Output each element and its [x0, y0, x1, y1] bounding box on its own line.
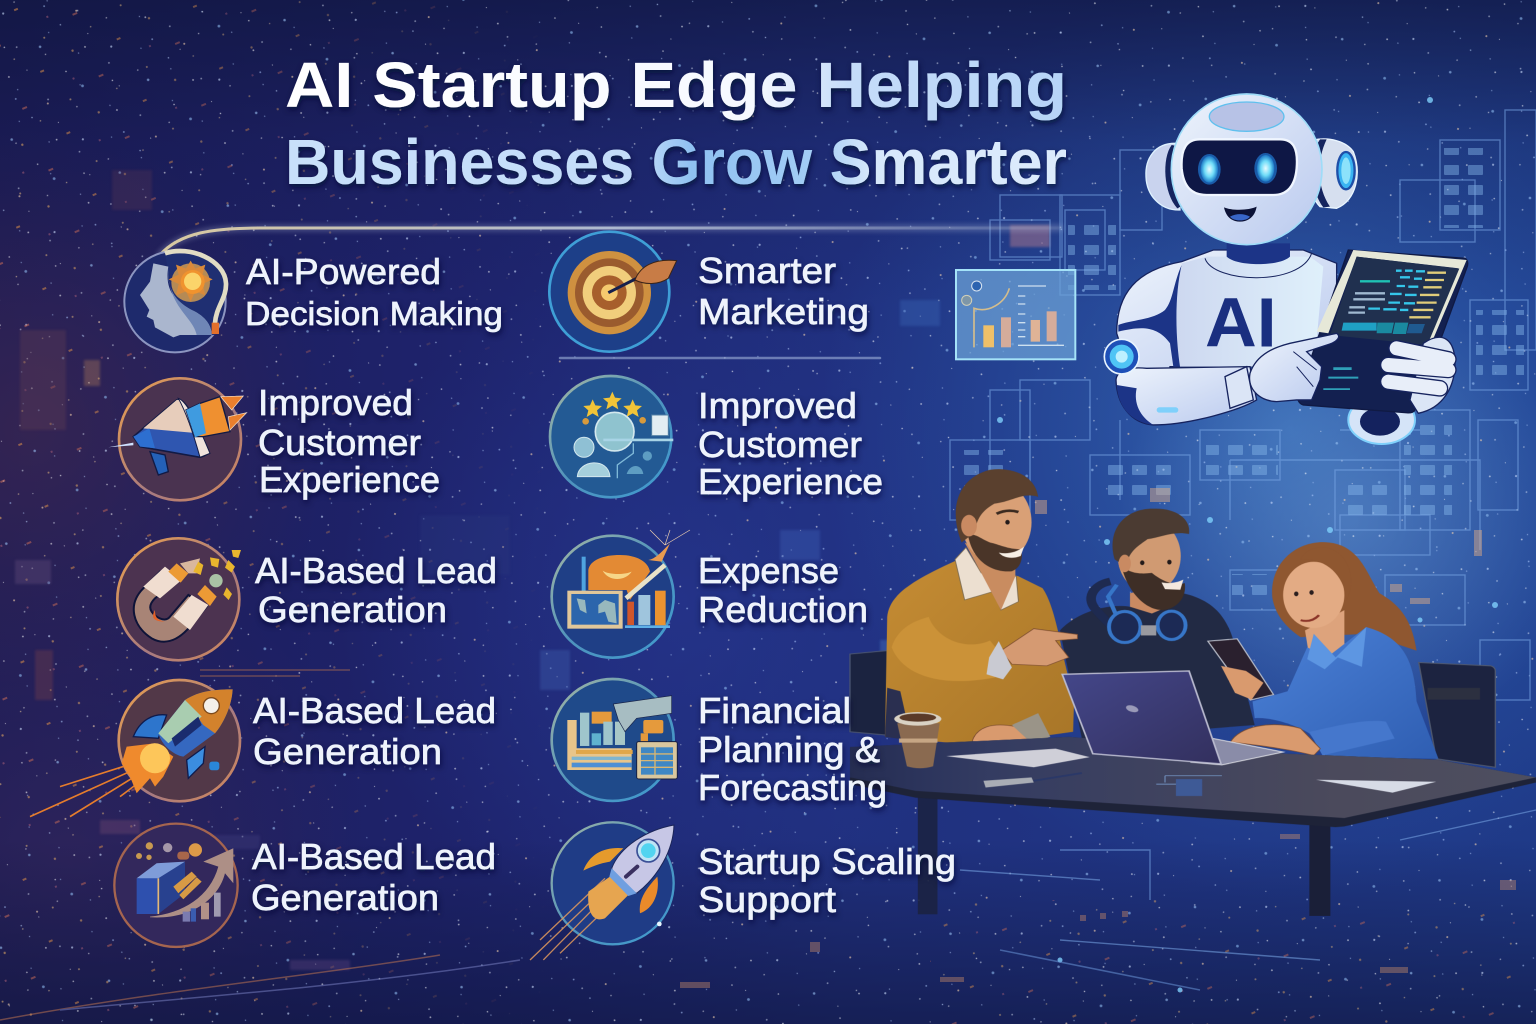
- label: Smarter: [698, 250, 836, 291]
- label: Customer: [258, 422, 421, 463]
- label: [258, 382, 440, 500]
- man with headphones: [1060, 509, 1255, 739]
- item: Startup Scaling Support: [530, 822, 956, 960]
- item: Financial Planning & Forecasting: [552, 679, 887, 808]
- item: AI-Powered Decision Making: [124, 251, 503, 352]
- header rule lines: [160, 228, 1060, 358]
- laptop: [1062, 671, 1283, 765]
- skull: [1171, 94, 1322, 245]
- label: AI-Powered: [246, 251, 441, 292]
- label: AI-Based Lead: [255, 550, 497, 591]
- icon: head with gear: [124, 251, 226, 352]
- icon: orange rocket: [30, 680, 240, 817]
- man in mustard sweater: [885, 469, 1078, 754]
- label: [253, 690, 496, 772]
- label: [251, 836, 496, 918]
- icon: customers and stars: [550, 376, 673, 497]
- label: Financial: [698, 690, 851, 731]
- label: Generation: [253, 731, 442, 772]
- tablet: [1298, 250, 1468, 413]
- label: [698, 690, 887, 808]
- floating chart panel: [956, 270, 1075, 359]
- icon: target and dart: [549, 232, 677, 352]
- woman in blue shirt: [1208, 542, 1438, 759]
- label: [698, 841, 956, 920]
- label: Startup Scaling: [698, 841, 956, 882]
- icon: box and growth arrow: [114, 824, 238, 947]
- icon: megaphone: [108, 378, 247, 500]
- chairs: [850, 651, 1495, 767]
- phone: [1208, 639, 1274, 700]
- right column of benefits: [530, 232, 956, 960]
- icon: magnet: [117, 538, 241, 660]
- gadget on table: [1156, 776, 1222, 796]
- item: Smarter Marketing: [549, 232, 869, 352]
- label: Improved: [698, 385, 857, 426]
- coffee cup: [894, 712, 941, 768]
- robot left hand: [1388, 337, 1455, 413]
- label: [698, 550, 868, 630]
- label: Planning &: [698, 729, 880, 770]
- label: Expense: [698, 550, 839, 591]
- headphones: [1091, 581, 1186, 643]
- label: Decision Making: [245, 295, 503, 332]
- title line 2: Businesses Grow Smarter: [285, 126, 1067, 198]
- title: [285, 49, 1067, 198]
- team at table: [850, 469, 1536, 916]
- item: AI-Based Lead Generation (magnet): [117, 538, 497, 660]
- item: Improved Customer Experience (stars): [550, 376, 883, 502]
- robot lower wheel: [1348, 396, 1415, 444]
- label: AI-Based Lead: [252, 836, 496, 877]
- chest lettering: AI: [1205, 284, 1277, 362]
- icon: financial dashboard: [552, 679, 677, 801]
- robot right hand: [1225, 333, 1339, 408]
- icon: piggy bank and charts: [552, 530, 690, 658]
- item: Expense Reduction: [552, 530, 868, 658]
- label: Experience: [259, 459, 440, 500]
- right ear: [1307, 139, 1357, 208]
- item: Improved Customer Experience: [108, 378, 440, 500]
- typing hand: [1231, 725, 1320, 755]
- pointing hand: [1001, 629, 1078, 666]
- label: [245, 251, 503, 332]
- label: AI-Based Lead: [253, 690, 496, 731]
- resting hand: [972, 725, 1029, 754]
- elbow joint: [1104, 339, 1139, 374]
- label: Improved: [258, 382, 413, 423]
- icon: silver rocket: [530, 822, 674, 960]
- paper and pen: [946, 749, 1436, 793]
- label: Marketing: [698, 291, 869, 332]
- item: AI-Based Lead Generation (rocket): [30, 680, 496, 817]
- bottom lines: [0, 670, 1200, 1020]
- robot head: [1146, 94, 1357, 245]
- label: Reduction: [698, 589, 868, 630]
- label: [255, 550, 497, 630]
- left column of benefits: [30, 251, 503, 947]
- visor: [1182, 139, 1297, 195]
- robot: [1104, 94, 1468, 444]
- item: AI-Based Lead Generation (growth): [114, 824, 496, 947]
- label: Experience: [698, 461, 883, 502]
- table: [850, 737, 1536, 916]
- robot torso and arms: [1104, 243, 1337, 425]
- label: Generation: [258, 589, 447, 630]
- left ear: [1146, 143, 1180, 210]
- label: Customer: [698, 424, 862, 465]
- label: [698, 385, 883, 502]
- label: Forecasting: [698, 767, 887, 808]
- label: Generation: [251, 877, 439, 918]
- label: Support: [698, 879, 836, 920]
- label: [698, 250, 869, 332]
- title line 1: AI Startup Edge Helping: [285, 49, 1067, 121]
- mouth: [1224, 207, 1257, 222]
